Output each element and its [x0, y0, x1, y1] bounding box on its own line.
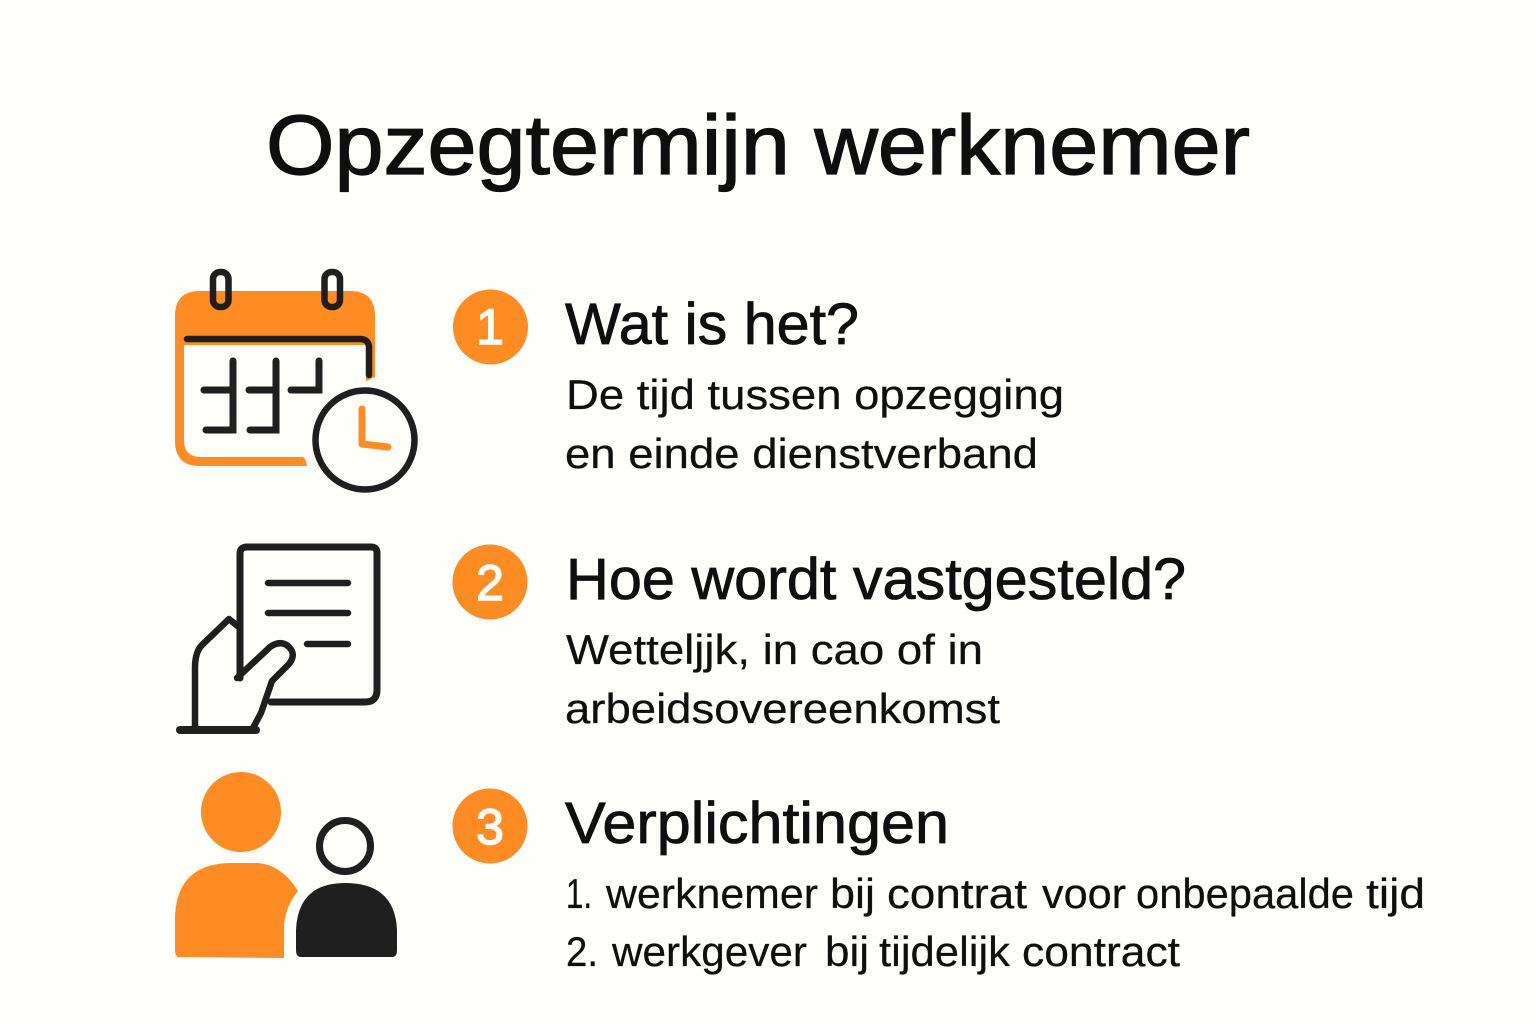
- text block: definition: De tijd tussen opzegging: [566, 371, 1064, 418]
- text block: obligations: contrat: [887, 870, 1027, 917]
- badge 2: [452, 544, 528, 620]
- text block: how it is determined: Wetteljjk, in cao of in: [566, 626, 983, 673]
- text block: obligations: werknemer: [605, 870, 818, 917]
- icon: calendar with clock: [175, 272, 414, 490]
- title: Opzegtermijn werknemer: [266, 98, 1250, 192]
- text block: obligations: onbepaalde: [1136, 870, 1354, 917]
- badge 1: 1: [476, 299, 504, 355]
- text block: obligations: tijd: [1366, 870, 1425, 917]
- heading: Verplichtingen: Verplichtingen: [565, 791, 949, 856]
- text block: obligations: tijdelijk: [879, 928, 1011, 975]
- icon: two people: [175, 772, 397, 958]
- text block: obligations: [566, 870, 1425, 975]
- heading: Wat is het?: Wat is het?: [565, 292, 859, 357]
- text block: obligations: 1.: [566, 870, 592, 917]
- text block: how it is determined: [565, 626, 1000, 732]
- badge 1: [453, 290, 528, 364]
- icon: hand holding document: [180, 547, 377, 730]
- text block: obligations: voor: [1042, 870, 1126, 917]
- badge 2: 2: [476, 555, 504, 611]
- heading: Hoe wordt vastgesteld?: Hoe wordt vastgesteld?: [566, 547, 1186, 612]
- text block: obligations: contract: [1022, 928, 1180, 975]
- text block: definition: [565, 371, 1064, 477]
- text block: how it is determined: arbeidsovereenkomst: [565, 685, 1000, 732]
- text block: obligations: 2.: [566, 928, 598, 975]
- text block: definition: en einde dienstverband: [565, 430, 1038, 477]
- text block: obligations: bij: [825, 928, 869, 975]
- badge 3: [452, 788, 528, 864]
- badge 3: 3: [476, 799, 504, 855]
- text block: obligations: werkgever: [611, 928, 807, 975]
- text block: obligations: bij: [830, 870, 875, 917]
